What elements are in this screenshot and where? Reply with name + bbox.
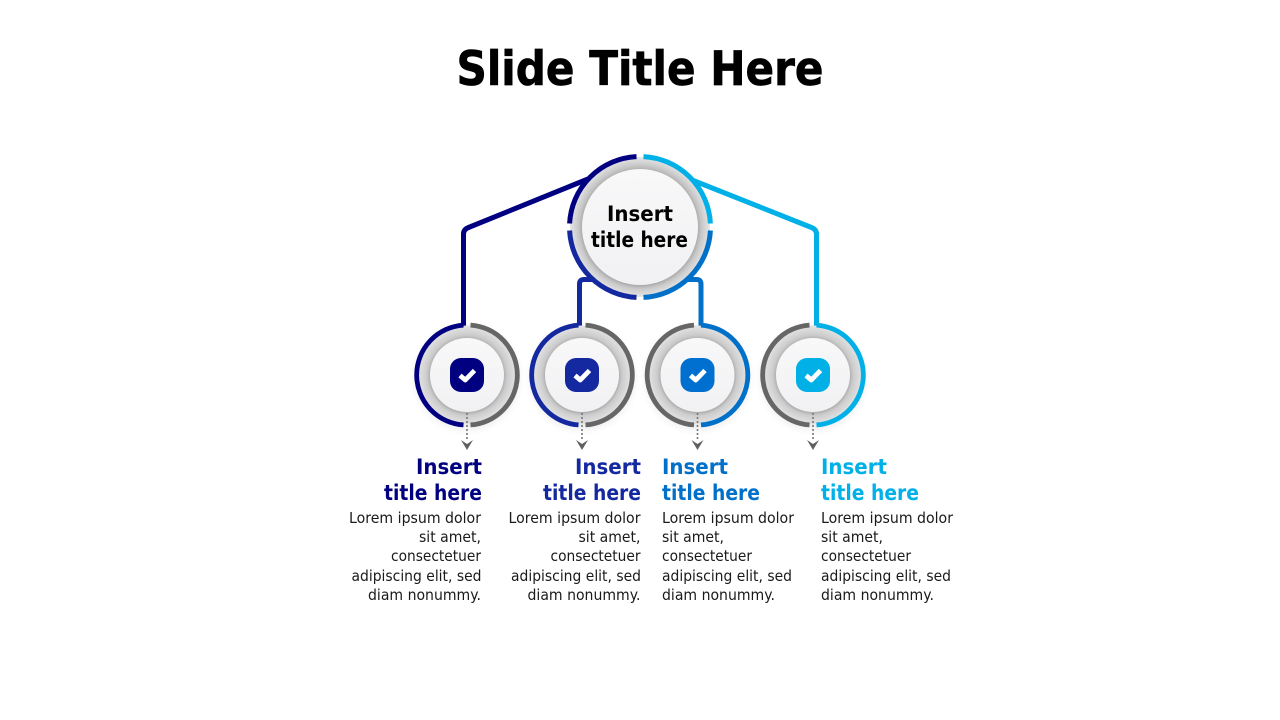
center hub circle: title here — [591, 228, 688, 252]
text block 1: title here — [384, 481, 482, 505]
text block 4: title here — [821, 481, 919, 505]
text block 2: adipiscing elit, sed — [511, 567, 641, 585]
node 1 — [415, 325, 519, 450]
text block 1: sit amet, — [419, 528, 481, 546]
text block 4: sit amet, — [821, 528, 883, 546]
text block 3: Lorem ipsum dolor — [662, 509, 795, 527]
title: Slide Title Here — [456, 42, 824, 97]
text block 2: consectetuer — [550, 547, 641, 565]
text block 3: diam nonummy. — [662, 586, 775, 604]
text block 3 — [662, 455, 795, 604]
connector: center hub to node 2 — [580, 280, 594, 326]
center hub circle — [570, 157, 710, 297]
connector: center hub to node 1 — [464, 179, 588, 326]
text block 2: sit amet, — [578, 528, 640, 546]
node 4 — [761, 325, 865, 450]
text block 3: adipiscing elit, sed — [662, 567, 792, 585]
text block 2: Lorem ipsum dolor — [508, 509, 641, 527]
text block 1: consectetuer — [391, 547, 482, 565]
text block 1 — [349, 455, 482, 604]
text block 4: Insert — [821, 455, 887, 479]
text block 3: title here — [662, 481, 760, 505]
text block 1: adipiscing elit, sed — [352, 567, 482, 585]
text block 1: Insert — [416, 455, 482, 479]
text block 2: Insert — [575, 455, 641, 479]
node 2 — [530, 325, 634, 450]
text block 3: Insert — [662, 455, 728, 479]
text block 4 — [821, 455, 954, 604]
text block 2: diam nonummy. — [528, 586, 640, 604]
text block 3: sit amet, — [662, 528, 724, 546]
text block 4: Lorem ipsum dolor — [821, 509, 954, 527]
text block 2: title here — [543, 481, 641, 505]
text block 3: consectetuer — [662, 547, 753, 565]
node 3 — [646, 325, 750, 450]
connector: center hub to node 4 — [692, 180, 816, 326]
text block 4: adipiscing elit, sed — [821, 567, 951, 585]
text block 1: Lorem ipsum dolor — [349, 509, 482, 527]
connector: center hub to node 3 — [688, 280, 701, 326]
text block 1: diam nonummy. — [368, 586, 481, 604]
text block 2 — [508, 455, 641, 604]
text block 4: diam nonummy. — [821, 586, 934, 604]
text block 4: consectetuer — [821, 547, 912, 565]
center hub circle: Insert — [607, 202, 673, 226]
